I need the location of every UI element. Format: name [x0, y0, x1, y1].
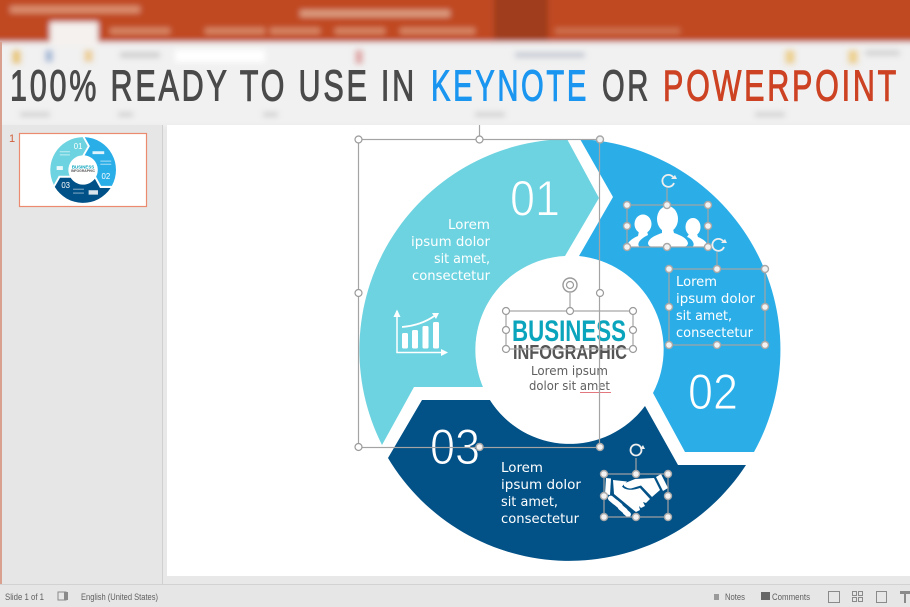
segment 03 navy: sit amet, — [501, 494, 558, 510]
segment 01 light cyan — [359, 139, 599, 445]
status bar — [0, 584, 910, 607]
slide canvas — [167, 125, 910, 576]
thumbnail diagram: BUSINESS — [72, 164, 94, 169]
segment 03 navy — [388, 400, 746, 561]
left thumbnail panel — [0, 42, 163, 607]
selection frame: main segment — [355, 125, 604, 450]
icon: people — [627, 206, 708, 247]
center circle text: INFOGRAPHIC — [513, 341, 627, 364]
left thumbnail panel: 1 — [9, 133, 15, 145]
thumbnail diagram: INFOGRAPHIC — [71, 169, 95, 173]
segment 01 light cyan: Lorem — [448, 217, 490, 233]
thumbnail diagram: 01 — [74, 142, 82, 151]
selection frame: handshake icon — [600, 444, 672, 520]
selection frame: people icon — [624, 175, 712, 250]
segment 01 light cyan: ipsum dolor — [411, 234, 490, 250]
center circle text — [476, 256, 662, 444]
thumbnail diagram: 03 — [61, 181, 70, 190]
headline — [10, 62, 899, 110]
status bar: Comments — [772, 592, 810, 602]
center circle text: Lorem ipsum — [531, 363, 608, 378]
blurred ribbon — [0, 0, 910, 126]
headline: 100% READY TO USE IN — [10, 62, 417, 110]
selection frame: segment 02 text box — [666, 239, 768, 348]
status bar: English (United States) — [81, 592, 158, 602]
segment 03 navy: 03 — [430, 419, 480, 475]
thumbnail diagram: 02 — [102, 172, 110, 181]
headline: OR — [602, 62, 651, 110]
segment 02 blue: ipsum dolor — [676, 291, 755, 307]
segment 03 navy: ipsum dolor — [501, 477, 581, 493]
segment 01 light cyan: consectetur — [412, 268, 490, 284]
segment 03 navy: consectetur — [501, 511, 579, 527]
segment 01 light cyan: sit amet, — [434, 251, 490, 267]
selection frame: title text box — [502, 278, 636, 352]
icon: bar chart — [394, 310, 448, 356]
icon: handshake — [605, 474, 668, 518]
center circle text: dolor sit amet — [529, 378, 610, 393]
segment 02 blue: sit amet, — [676, 308, 732, 324]
status bar: Notes — [725, 592, 745, 602]
segment 02 blue: consectetur — [676, 325, 753, 341]
segment 02 blue: Lorem — [676, 274, 717, 290]
segment 03 navy: Lorem — [501, 460, 543, 476]
segment 02 blue: 02 — [688, 364, 738, 420]
headline: KEYNOTE — [431, 62, 589, 110]
segment 01 light cyan: 01 — [510, 170, 560, 226]
center circle text: BUSINESS — [512, 315, 626, 348]
thumbnail diagram — [50, 137, 116, 203]
status bar: Slide 1 of 1 — [5, 592, 44, 602]
segment 02 blue — [579, 139, 780, 452]
